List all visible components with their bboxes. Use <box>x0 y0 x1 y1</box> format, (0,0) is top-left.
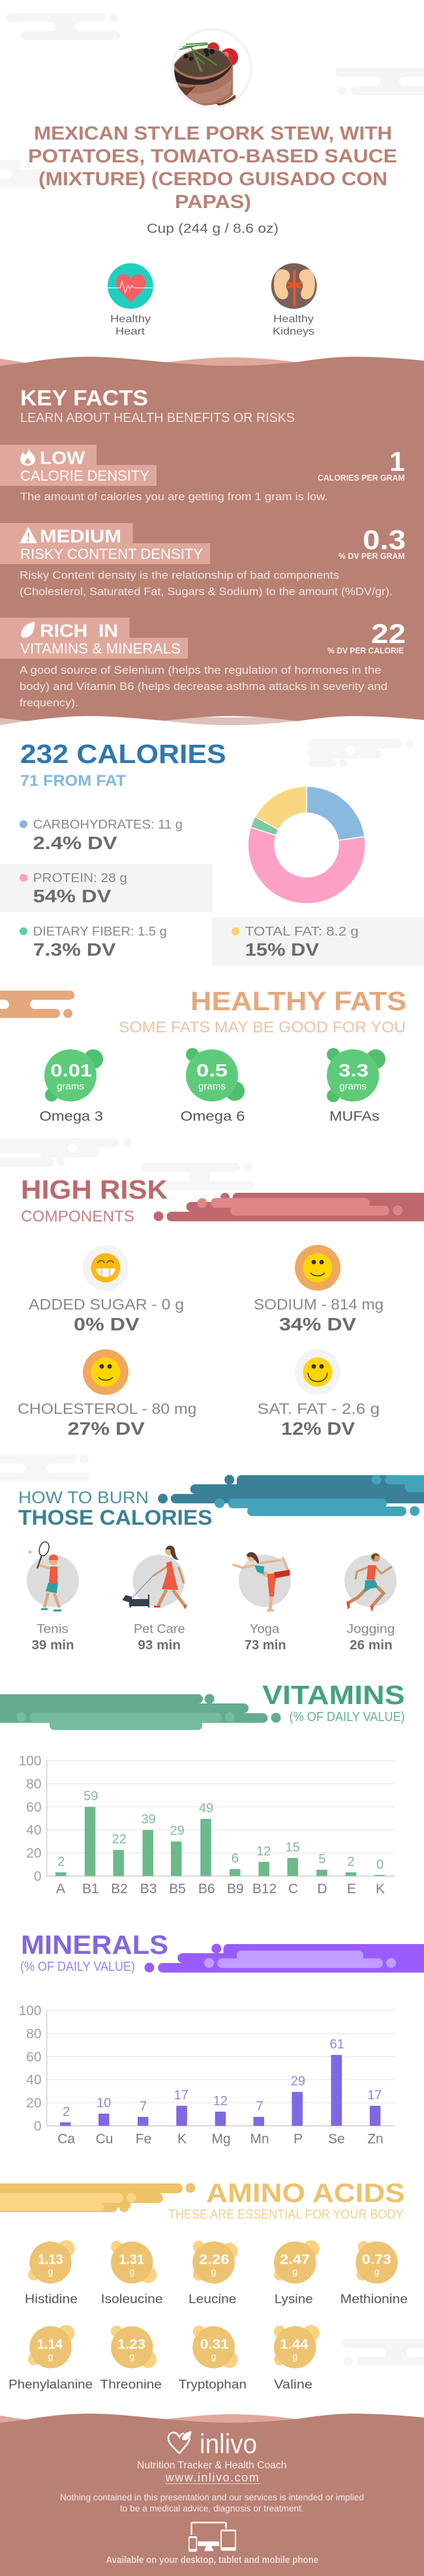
label: healthy heart: Heart <box>115 326 145 337</box>
amino: valine: Valine <box>274 2378 312 2391</box>
heading: minerals: (% OF DAILY VALUE) <box>20 1960 135 1974</box>
disclaimer <box>60 2492 364 2513</box>
amino: histidine <box>25 2240 78 2307</box>
fat: omega 3: 0.01 <box>51 1061 92 1081</box>
bar chart: minerals: Ca <box>57 2132 75 2147</box>
fact: rich in vitamins and minerals: 22 <box>371 618 406 649</box>
bar chart: minerals: 17 <box>174 2088 189 2103</box>
bar chart: vitamins: 0 <box>34 1869 42 1884</box>
bar chart: vitamins: 22 <box>112 1833 127 1847</box>
fact: medium risky content density: Risky Content density is the relationship of bad components <box>20 570 339 582</box>
amino: threonine: Threonine <box>100 2378 162 2391</box>
bar chart: minerals: K <box>177 2132 187 2147</box>
heading: key facts <box>20 385 295 425</box>
availability note: Available on your desktop, tablet and mobile phone <box>106 2555 318 2566</box>
bar chart: vitamins: B12 <box>252 1881 277 1896</box>
header shape: healthy fats <box>0 991 74 1018</box>
fat: omega 3: Omega 3 <box>39 1109 103 1124</box>
background cloud: behind title <box>0 160 98 188</box>
fact: rich in vitamins and minerals: VITAMINS & MINERALS <box>20 640 181 657</box>
activity: tennis: Tenis <box>37 1623 68 1636</box>
amino: isoleucine <box>101 2241 163 2307</box>
amino: phenylalanine: Phenylalanine <box>8 2378 93 2391</box>
amino: isoleucine: Isoleucine <box>101 2293 163 2307</box>
bar chart: vitamins: B1 <box>82 1881 99 1896</box>
fat: omega 6: grams <box>198 1081 226 1092</box>
icon: warning triangle <box>20 527 37 543</box>
heading: minerals <box>20 1930 168 1974</box>
risk: cholesterol <box>18 1349 196 1439</box>
heading: key facts: KEY FACTS <box>20 385 148 410</box>
fat: omega 3 <box>39 1049 103 1124</box>
amino: valine <box>274 2325 320 2391</box>
heading: high risk <box>21 1175 168 1225</box>
fact: rich in vitamins and minerals <box>0 618 406 709</box>
food photo <box>172 28 252 109</box>
bar chart: minerals: Se <box>328 2132 345 2147</box>
activity: tennis: 39 min <box>31 1638 74 1653</box>
activity: yoga <box>232 1552 291 1653</box>
heading: healthy fats <box>119 986 406 1036</box>
amino: lysine: 2.47 <box>280 2253 310 2268</box>
panel: key facts <box>0 357 424 725</box>
amino: isoleucine: 1.31 <box>119 2253 144 2268</box>
heading: amino acids: AMINO ACIDS <box>206 2178 405 2208</box>
legend: dietary fiber <box>20 925 167 960</box>
background cloud: top right <box>336 68 424 95</box>
bar chart: minerals: P <box>294 2132 303 2147</box>
activity: pet care <box>123 1546 187 1653</box>
bar chart: vitamins <box>18 1754 395 1896</box>
risk: saturated fat: 12% DV <box>281 1418 355 1439</box>
bar chart: minerals <box>18 2003 395 2147</box>
logo: inlivo: inlivo <box>200 2429 257 2459</box>
heading: amino acids <box>168 2178 405 2222</box>
bar chart: minerals: 0 <box>34 2119 42 2134</box>
bar chart: vitamins: B5 <box>169 1881 186 1896</box>
header shape: minerals <box>145 1943 424 1973</box>
legend: dietary fiber: 7.3% DV <box>33 940 116 960</box>
fact: medium risky content density: 0.3 <box>363 524 406 555</box>
bar chart: minerals: Mg <box>211 2132 231 2147</box>
amino: threonine: 1.23 <box>117 2337 145 2352</box>
legend: total fat <box>232 925 359 960</box>
heading: calories: 71 FROM FAT <box>20 772 126 790</box>
fact: rich in vitamins and minerals: body) and Vitamin B6 (helps decrease asthma attacks in severity and <box>20 681 387 693</box>
amino: methionine: Methionine <box>341 2293 408 2307</box>
amino: isoleucine: g <box>129 2266 134 2277</box>
amino: valine: 1.44 <box>280 2337 309 2352</box>
activity: pet care: 93 min <box>138 1638 181 1653</box>
heading: high risk: COMPONENTS <box>21 1208 134 1225</box>
bar chart: minerals: 7 <box>256 2099 264 2114</box>
header shape: vitamins <box>0 1694 280 1730</box>
heading: vitamins: VITAMINS <box>262 1680 405 1710</box>
activity: jogging: Jogging <box>347 1623 395 1636</box>
fact: low calorie density <box>0 445 405 503</box>
bar chart: minerals: Fe <box>136 2132 151 2147</box>
bar chart: minerals: 17 <box>367 2088 382 2103</box>
bar chart: vitamins: C <box>288 1881 298 1896</box>
bar chart: minerals: Mn <box>250 2132 269 2147</box>
logo: inlivo <box>168 2429 257 2459</box>
header shape: amino acids <box>0 2183 196 2212</box>
bar chart: vitamins: B9 <box>227 1881 244 1896</box>
bar chart: vitamins: B3 <box>140 1881 157 1896</box>
legend: carbohydrates <box>20 818 183 853</box>
risk: added sugar: 0% DV <box>74 1314 140 1334</box>
background cloud: high risk left <box>0 1138 132 1167</box>
legend: total fat: TOTAL FAT: 8.2 g <box>245 925 359 939</box>
bar chart: minerals: 29 <box>291 2074 305 2089</box>
tagline: Nutrition Tracker & Health Coach <box>137 2460 287 2471</box>
panel: footer <box>0 2414 424 2576</box>
bar chart: vitamins: 59 <box>83 1790 98 1804</box>
bar chart: vitamins: 80 <box>26 1776 42 1791</box>
label: healthy heart <box>110 314 151 337</box>
bar chart: vitamins: K <box>376 1881 385 1896</box>
risk: cholesterol: 27% DV <box>68 1418 145 1439</box>
fact: medium risky content density: MEDIUM <box>40 526 121 546</box>
bar chart: vitamins: 2 <box>57 1855 65 1869</box>
heading: minerals: MINERALS <box>21 1930 168 1960</box>
heading: how to burn those calories <box>18 1488 213 1529</box>
title <box>28 123 397 213</box>
amino: phenylalanine <box>8 2325 93 2391</box>
bar chart: vitamins: E <box>347 1881 356 1896</box>
amino: valine: g <box>292 2351 297 2361</box>
background cloud: amino right <box>342 2339 424 2366</box>
heading: key facts: LEARN ABOUT HEALTH BENEFITS OR RISKS <box>20 411 295 425</box>
bar chart: minerals: 10 <box>97 2096 111 2110</box>
fact: rich in vitamins and minerals: % DV PER CALORIE <box>327 646 404 655</box>
risk: saturated fat <box>258 1349 380 1439</box>
header shape: burn calories <box>158 1475 424 1516</box>
legend: protein: PROTEIN: 28 g <box>33 871 127 886</box>
fact: medium risky content density: RISKY CONTENT DENSITY <box>20 546 203 562</box>
legend: carbohydrates: 2.4% DV <box>33 833 117 853</box>
background cloud: burn left <box>0 1454 92 1482</box>
amino: methionine: 0.73 <box>362 2253 391 2268</box>
risk: added sugar <box>29 1245 184 1334</box>
legend highlight bands <box>0 864 424 966</box>
amino: tryptophan: Tryptophan <box>179 2378 247 2391</box>
title: MEXICAN STYLE PORK STEW, WITH <box>34 123 392 144</box>
icon: leaf <box>22 622 35 638</box>
bar chart: vitamins: 100 <box>18 1754 42 1769</box>
icon: devices <box>189 2523 236 2552</box>
risk: cholesterol: CHOLESTEROL - 80 mg <box>18 1400 196 1417</box>
heading: calories <box>20 739 226 790</box>
bar chart: vitamins: A <box>56 1881 65 1896</box>
label: healthy heart: Healthy <box>110 314 151 325</box>
risk: sodium: 34% DV <box>279 1314 356 1334</box>
activity: pet care: Pet Care <box>134 1623 185 1636</box>
bar chart: minerals: 80 <box>26 2026 42 2041</box>
icon: healthy kidneys <box>271 263 317 309</box>
bar chart: minerals: 61 <box>329 2037 344 2052</box>
amino: leucine <box>189 2241 238 2307</box>
background cloud: top left <box>7 13 121 40</box>
bar chart: vitamins: 2 <box>347 1855 355 1869</box>
header shape: high risk <box>154 1193 424 1221</box>
background cloud: high risk center <box>141 1163 254 1190</box>
title: (MIXTURE) (CERDO GUISADO CON <box>38 169 387 190</box>
bar chart: minerals: Cu <box>96 2132 113 2147</box>
title: PAPAS) <box>175 192 251 213</box>
amino: lysine <box>274 2240 320 2307</box>
website link: www.inlivo.com <box>165 2471 259 2484</box>
amino: methionine <box>341 2241 408 2307</box>
icon: flame <box>20 448 35 466</box>
fat: mufas: 3.3 <box>339 1061 369 1081</box>
amino: lysine: Lysine <box>275 2293 313 2307</box>
fact: low calorie density: 1 <box>389 446 404 477</box>
fact: rich in vitamins and minerals: frequency). <box>20 697 78 709</box>
heading: vitamins <box>262 1680 405 1724</box>
risk: saturated fat: SAT. FAT - 2.6 g <box>258 1400 380 1417</box>
fat: mufas: MUFAs <box>329 1109 380 1124</box>
bar chart: minerals: 20 <box>26 2096 42 2111</box>
bar chart: minerals: 60 <box>26 2050 42 2065</box>
amino: phenylalanine: 1.14 <box>37 2337 63 2352</box>
fact: low calorie density: The amount of calories you are getting from 1 gram is low. <box>20 491 327 503</box>
amino: threonine: g <box>129 2351 134 2361</box>
fat: omega 6: Omega 6 <box>180 1109 245 1124</box>
label: healthy kidneys: Kidneys <box>273 326 314 337</box>
bar chart: vitamins: 39 <box>141 1812 156 1827</box>
legend: total fat: 15% DV <box>245 940 319 960</box>
heading: healthy fats: SOME FATS MAY BE GOOD FOR YOU <box>119 1019 406 1036</box>
activity: tennis <box>27 1540 79 1653</box>
fact: low calorie density: CALORIE DENSITY <box>20 468 149 484</box>
heading: how to burn those calories: HOW TO BURN <box>18 1488 149 1507</box>
bar chart: vitamins: 29 <box>170 1824 185 1838</box>
bar chart: vitamins: 0 <box>376 1858 384 1872</box>
amino: leucine: Leucine <box>189 2293 236 2307</box>
heading: amino acids: THESE ARE ESSENTIAL FOR YOUR BODY <box>168 2208 404 2222</box>
legend: carbohydrates: CARBOHYDRATES: 11 g <box>33 818 183 832</box>
risk: sodium: SODIUM - 814 mg <box>254 1296 384 1313</box>
activity: jogging: 26 min <box>350 1638 393 1653</box>
fat: omega 6 <box>180 1048 245 1124</box>
title: POTATOES, TOMATO-BASED SAUCE <box>28 146 397 167</box>
activity: jogging <box>344 1553 397 1653</box>
fact: medium risky content density: (Cholesterol, Saturated Fat, Sugars & Sodium) to the amount (%DV/gr). <box>20 586 393 597</box>
disclaimer: Nothing contained in this presentation and our services is intended or implied <box>60 2492 364 2502</box>
bar chart: vitamins: D <box>317 1881 327 1896</box>
serving size: Cup (244 g / 8.6 oz) <box>147 222 279 236</box>
legend: dietary fiber: DIETARY FIBER: 1.5 g <box>33 925 167 939</box>
fat: omega 6: 0.5 <box>196 1061 228 1081</box>
label: healthy kidneys <box>273 314 314 337</box>
fat: omega 3: grams <box>57 1081 84 1092</box>
bar chart: vitamins: B6 <box>198 1881 215 1896</box>
bar chart: minerals: 7 <box>140 2099 147 2114</box>
amino: tryptophan: 0.31 <box>200 2337 229 2352</box>
bar chart: vitamins: 12 <box>256 1844 271 1859</box>
amino: tryptophan: g <box>211 2351 216 2361</box>
amino: histidine: g <box>48 2266 53 2277</box>
bar chart: minerals: 40 <box>26 2073 42 2088</box>
fact: medium risky content density: % DV PER GRAM <box>339 552 405 561</box>
fact: low calorie density: LOW <box>40 447 85 468</box>
heading: healthy fats: HEALTHY FATS <box>190 986 406 1016</box>
bar chart: minerals: 100 <box>18 2003 42 2018</box>
amino: tryptophan <box>179 2326 247 2391</box>
fact: rich in vitamins and minerals: RICH IN <box>40 620 118 640</box>
bar chart: vitamins: B2 <box>111 1881 128 1896</box>
fat: mufas: grams <box>339 1081 367 1092</box>
bar chart: vitamins: 40 <box>26 1823 42 1838</box>
amino: methionine: g <box>374 2266 379 2277</box>
disclaimer: to be a medical advice, diagnosis or treatment. <box>120 2503 304 2513</box>
heading: how to burn those calories: THOSE CALORIES <box>18 1506 213 1529</box>
label: healthy kidneys: Healthy <box>273 314 314 325</box>
amino: threonine <box>100 2326 162 2391</box>
amino: leucine: g <box>211 2266 216 2277</box>
heading: calories: 232 CALORIES <box>20 739 226 769</box>
heading: vitamins: (% OF DAILY VALUE) <box>290 1710 405 1724</box>
background cloud: calories <box>308 739 414 768</box>
icon: healthy heart <box>108 263 153 309</box>
bar chart: vitamins: 15 <box>285 1840 300 1855</box>
bar chart: minerals: 2 <box>63 2104 70 2119</box>
amino: lysine: g <box>292 2266 297 2277</box>
bar chart: vitamins: 6 <box>232 1851 239 1866</box>
bar chart: minerals: Zn <box>367 2132 384 2147</box>
risk: sodium <box>254 1245 384 1334</box>
activity: yoga: 73 min <box>245 1638 286 1653</box>
legend: protein: 54% DV <box>33 886 112 906</box>
donut chart <box>248 786 365 904</box>
bar chart: minerals: 12 <box>213 2094 228 2108</box>
bar chart: vitamins: 60 <box>26 1800 42 1815</box>
bar chart: vitamins: 49 <box>199 1801 213 1816</box>
bar chart: vitamins: 5 <box>318 1852 326 1866</box>
bar chart: vitamins: 20 <box>26 1846 42 1861</box>
fact: medium risky content density <box>0 523 406 597</box>
legend: protein <box>20 871 127 906</box>
fact: rich in vitamins and minerals: A good source of Selenium (helps the regulation of hormones in the <box>20 665 382 676</box>
fact: low calorie density: CALORIES PER GRAM <box>318 473 405 483</box>
activity: yoga: Yoga <box>250 1623 280 1636</box>
amino: leucine: 2.26 <box>199 2253 230 2268</box>
risk: added sugar: ADDED SUGAR - 0 g <box>29 1296 184 1313</box>
amino: histidine: 1.13 <box>38 2253 63 2268</box>
amino: histidine: Histidine <box>25 2293 78 2307</box>
amino: phenylalanine: g <box>48 2351 53 2361</box>
fat: mufas <box>327 1048 386 1124</box>
heading: high risk: HIGH RISK <box>21 1175 168 1205</box>
